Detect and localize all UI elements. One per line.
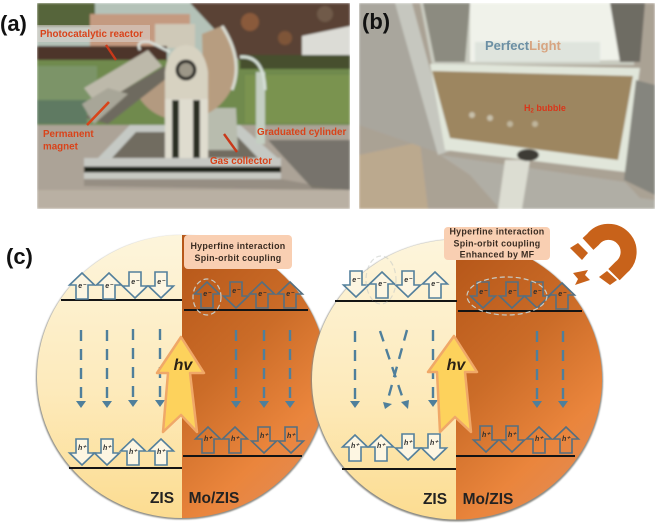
label: H2 bubble: H [524,103,530,113]
icon: horseshoe magnet [570,232,629,285]
panel label (a): (a) [0,11,27,36]
panel label (b): (b) [362,9,390,34]
charge labels: e⁻ [78,283,87,290]
charge labels: h⁺ [351,443,360,450]
label: Mo/ZIS: Mo/ZIS [463,491,513,508]
hv light arrow [157,337,204,432]
sector plate [202,26,236,115]
label: Gas collector: Gas collector [210,156,272,167]
reactor bar [86,66,167,124]
charge labels: h⁺ [78,445,87,452]
label: H2 bubble: bubble [534,103,566,113]
panel b: photo of reactor with H2 bubbles [359,3,655,209]
charge labels: h⁺ [377,443,386,450]
dashed transition arrows [350,330,568,409]
band lines [61,300,308,468]
label: Permanent magnet: magnet [43,142,79,152]
charge labels: h⁺ [562,436,571,443]
dashed highlight ring [193,279,221,315]
base bar [84,158,281,179]
charge labels: e⁻ [431,281,440,288]
charge labels: e⁻ [558,291,567,298]
electron spin arrows, ZIS [342,271,448,461]
charge labels: e⁻ [533,289,542,296]
back frame [98,125,280,160]
label: Photocatalytic reactor: Photocatalytic reactor [40,29,143,40]
charge labels: e⁻ [203,291,212,298]
callout: interactions enhanced by magnetic field: Enhanced by MF [460,250,535,260]
charge labels: h⁺ [260,433,269,440]
label background [37,25,150,42]
dashed highlight rings [366,256,547,315]
charge labels: e⁻ [258,291,267,298]
charge labels: h⁺ [430,440,439,447]
charge labels: h⁺ [103,445,112,452]
charge labels [78,279,296,456]
charge labels: h⁺ [482,432,491,439]
charge labels: e⁻ [232,288,241,295]
label: PerfectLight logo: PerfectLight [485,38,562,53]
column [165,45,208,100]
hv light arrow [428,336,477,432]
charge labels: e⁻ [352,277,361,284]
electron spin arrows, ZIS [70,272,174,465]
label: hv: hv [174,357,193,374]
dashed transition arrows [76,329,295,408]
charge labels: e⁻ [157,279,166,286]
diagram: right circle ZIS and Mo/ZIS with magnetic field [311,226,603,522]
charge labels: h⁺ [204,436,213,443]
arrow: reactor [106,45,116,60]
label: H2 bubble: 2 [530,108,534,114]
panel a: photo of photocatalytic reactor setup [37,3,350,209]
charge labels: h⁺ [157,449,166,456]
electron spin arrows, Mo/ZIS [470,282,578,453]
callout: interactions: Spin-orbit coupling [194,253,282,263]
charge labels: e⁻ [105,283,114,290]
band lines [335,301,582,469]
callout: interactions enhanced by magnetic field: Spin-orbit coupling [453,238,541,248]
label: hv: hv [447,357,466,374]
charge labels: h⁺ [287,433,296,440]
charge labels: e⁻ [404,277,413,284]
callout: interactions enhanced by magnetic field: Hyperfine interaction [449,226,545,236]
diagram: left circle ZIS and Mo/ZIS [36,234,328,520]
charge labels: h⁺ [129,449,138,456]
charge labels: e⁻ [378,281,387,288]
arrow: magnet [87,102,109,125]
label: Permanent magnet: Permanent [43,129,94,140]
panel label (c): (c) [6,244,33,269]
callout: interactions enhanced by magnetic field [444,226,550,260]
label: ZIS: ZIS [150,490,174,507]
charge labels: e⁻ [131,279,140,286]
label: ZIS: ZIS [423,491,447,508]
charge labels: h⁺ [404,440,413,447]
electron spin arrows, Mo/ZIS [194,282,304,453]
charge labels: h⁺ [508,432,517,439]
charge labels: h⁺ [231,436,240,443]
callout: interactions [184,235,292,269]
charge labels: e⁻ [286,291,295,298]
charge labels: e⁻ [479,289,488,296]
arrow: collector [224,134,237,152]
charge labels [351,277,571,450]
label: Graduated cylinder: Graduated cylinder [257,127,346,138]
callout: interactions: Hyperfine interaction [190,241,286,251]
charge labels: h⁺ [535,436,544,443]
glass collector [208,108,238,150]
label: Mo/ZIS: Mo/ZIS [189,490,239,507]
charge labels: e⁻ [508,289,517,296]
